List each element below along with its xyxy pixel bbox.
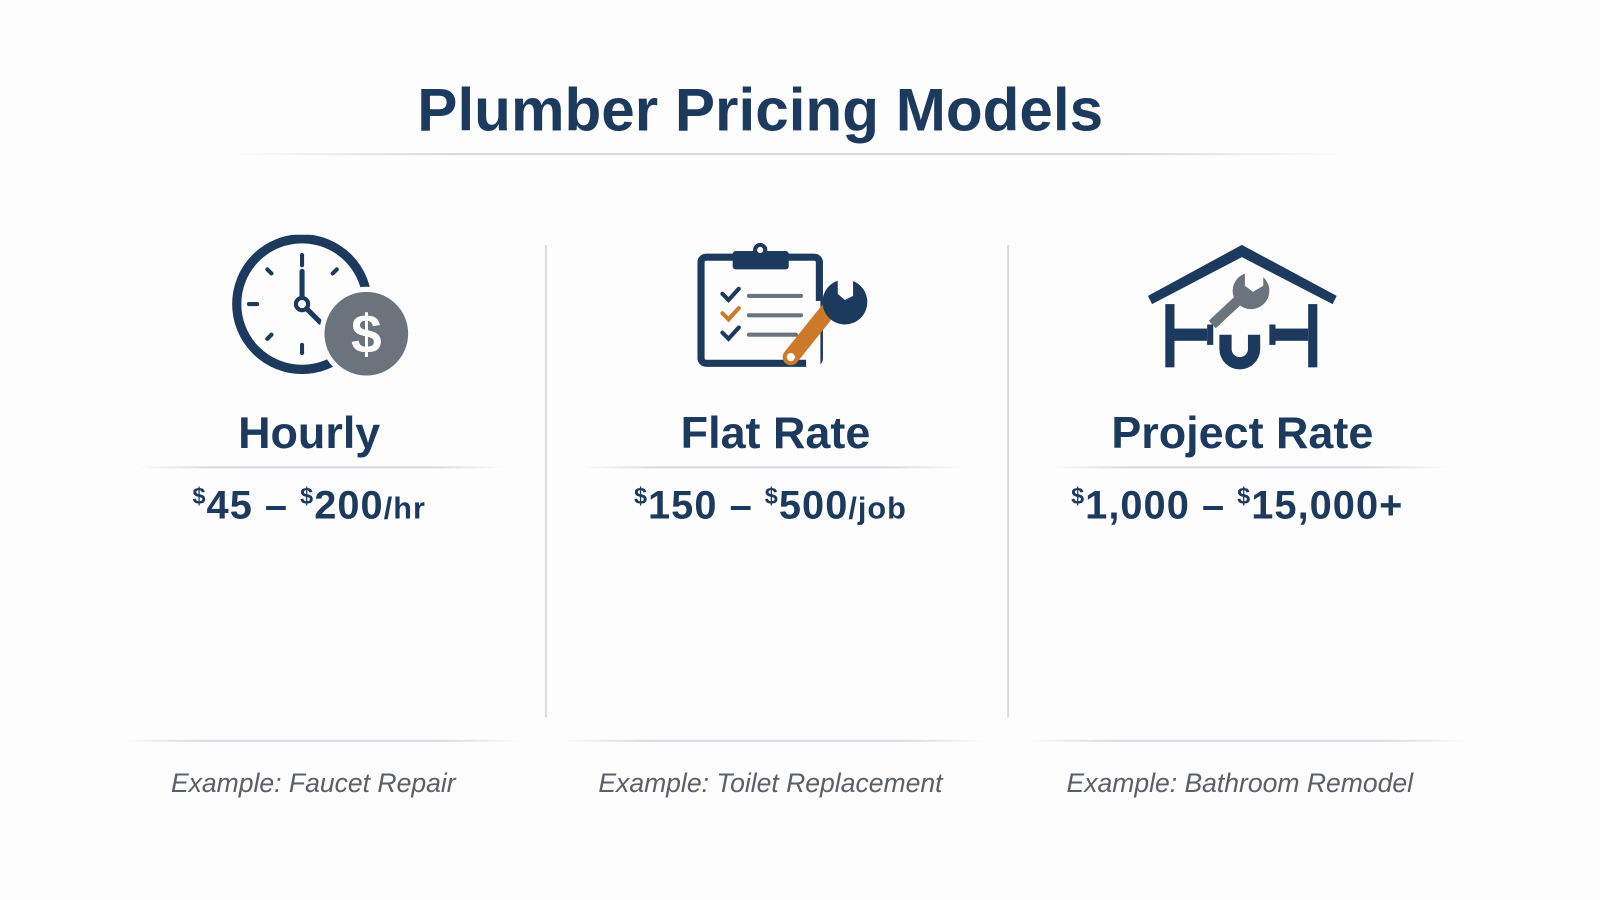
heading: Flat Rate: Flat Rate — [681, 408, 870, 458]
panel: hourly — [139, 234, 504, 798]
icon: clipboard with wrench — [697, 242, 868, 367]
heading: Hourly: Hourly — [238, 408, 380, 458]
example: Example: Bathroom Remodel — [1067, 767, 1413, 798]
price: $150 – $500/job — [634, 483, 907, 528]
example: Example: Faucet Repair — [171, 767, 456, 798]
icon: clock with dollar coin — [232, 234, 408, 376]
icon: clock with dollar coin: $ — [351, 303, 382, 365]
panel: project rate — [1044, 244, 1450, 798]
title: Plumber Pricing Models — [417, 77, 1103, 144]
heading: Project Rate: Project Rate — [1111, 408, 1373, 458]
price: $1,000 – $15,000+ — [1071, 483, 1403, 528]
example: Example: Toilet Replacement — [598, 767, 942, 798]
icon: house with pipes and wrench — [1148, 244, 1337, 370]
price: $45 – $200/hr — [192, 483, 426, 528]
panel: flat rate — [578, 242, 967, 798]
